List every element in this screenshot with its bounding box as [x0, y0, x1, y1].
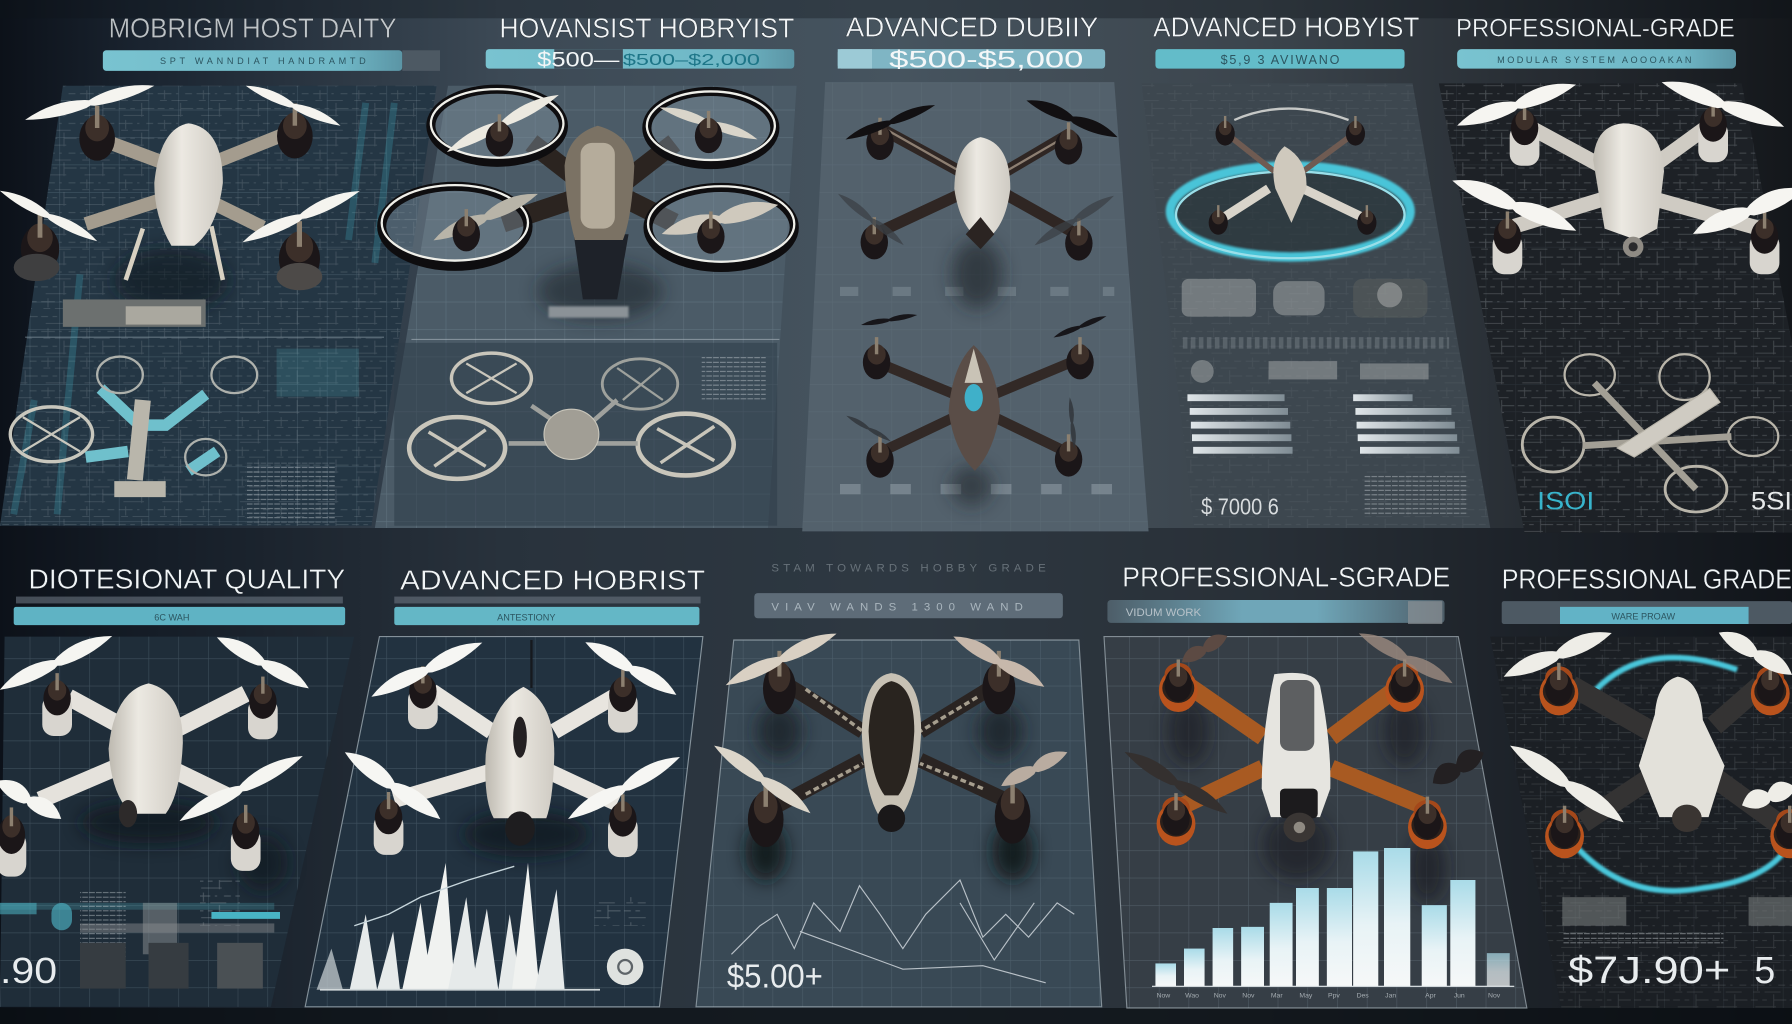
glowing ring — [1570, 658, 1792, 891]
card background — [1104, 637, 1527, 1008]
price bar — [1457, 49, 1736, 69]
price bar — [486, 46, 794, 71]
title: PROFESSIONAL-SGRADE — [1122, 561, 1450, 592]
drone: white quadcopter — [341, 635, 683, 857]
price bar: $500-$5,000 — [889, 46, 1083, 73]
price: $7J.90+ — [1568, 949, 1730, 991]
panel: top tier 3 — [802, 12, 1149, 531]
card background — [375, 86, 797, 528]
axis labels: May — [1299, 993, 1313, 1000]
drone: white quadcopter — [0, 79, 362, 327]
bar chart — [1152, 848, 1514, 1000]
axis labels: Apr — [1425, 993, 1437, 1000]
price bar: 6C WAH — [154, 613, 189, 623]
faint title: STAM TOWARDS HOBBY GRADE — [771, 562, 1046, 574]
detail thumbnails — [1182, 279, 1429, 383]
drone: dark quadcopter, lower — [845, 312, 1107, 506]
panel: top tier 1 — [0, 13, 440, 526]
drone: white quadcopter — [0, 628, 313, 891]
price bar: VIDUM WORK — [1126, 607, 1202, 619]
axis labels: Mar — [1271, 993, 1283, 1000]
card background — [1439, 83, 1792, 533]
card background — [0, 637, 354, 1007]
detail thumbnails — [1562, 897, 1792, 945]
detail thumbnails — [0, 880, 280, 989]
price bar — [754, 593, 1063, 618]
drone: silver folded X — [1522, 354, 1778, 512]
price bar — [14, 597, 345, 625]
card background — [0, 86, 437, 526]
price bar — [394, 597, 701, 625]
axis labels: Wao — [1185, 993, 1199, 1000]
drone: teal blueprint quadcopter — [10, 349, 359, 522]
price bar: $500— — [537, 46, 620, 71]
price bar: $500–$2,000 — [623, 52, 760, 69]
drone: white pro quadcopter — [1449, 74, 1792, 274]
axis labels — [1157, 993, 1501, 1000]
card background — [305, 637, 703, 1007]
panel: bottom tier 3 — [696, 562, 1102, 1007]
drone: ring quadcopter — [1170, 109, 1410, 258]
price label, teal: ISOI — [1537, 488, 1594, 516]
price bar — [103, 50, 440, 71]
price bar: ANTESTIONY — [497, 613, 555, 623]
price bar: WARE PROAW — [1611, 611, 1676, 621]
title: MOBRIGM HOST DAITY — [109, 13, 397, 44]
bar list — [1187, 394, 1459, 454]
card background — [696, 640, 1102, 1007]
drone: dark quadcopter, upper — [836, 94, 1120, 309]
axis labels: Nov — [1242, 993, 1255, 1000]
panel: top tier 4 — [1142, 12, 1490, 528]
card background — [802, 82, 1149, 531]
line chart — [731, 880, 1074, 983]
title: HOVANSIST HOBRYIST — [499, 13, 795, 44]
price: .90 — [0, 950, 57, 991]
price bar — [838, 46, 1105, 73]
price, cropped: 5 — [1754, 949, 1775, 991]
panel: bottom tier 5 — [1490, 564, 1792, 1008]
price bar — [1107, 600, 1445, 624]
drone: silver wireframe — [409, 353, 766, 479]
axis labels: Jan — [1385, 993, 1396, 1000]
card background — [1490, 637, 1792, 1008]
price bar: $5,9 3 AVIWANO — [1221, 53, 1340, 67]
panel: bottom tier 2 — [305, 565, 705, 1007]
price: $5.00+ — [727, 958, 823, 995]
drone: white and orange quadcopter — [1122, 626, 1488, 903]
spike chart — [317, 863, 646, 990]
title: PROFESSIONAL-GRADE — [1456, 15, 1735, 43]
spec text block — [1365, 475, 1467, 517]
title: DIOTESIONAT QUALITY — [29, 564, 345, 595]
panel: top tier 5 — [1439, 15, 1792, 533]
axis labels: Ppv — [1328, 993, 1340, 1000]
panel: top tier 2 — [375, 13, 797, 528]
title: ADVANCED DUBIIY — [846, 12, 1098, 43]
price bar — [1155, 49, 1405, 69]
drone: dark quadcopter — [711, 626, 1070, 881]
axis labels: Jun — [1454, 993, 1465, 1000]
title: ADVANCED HOBRIST — [400, 565, 705, 596]
card background — [1142, 83, 1490, 528]
price bar: VIAV WANDS 1300 WAND — [771, 601, 1023, 613]
panel: bottom tier 4 — [1104, 561, 1527, 1008]
drone: ducted quadcopter — [382, 89, 794, 320]
drone: white and dark quadcopter — [1500, 624, 1792, 858]
title: ADVANCED HOBYIST — [1153, 12, 1420, 43]
panel: bottom tier 1 — [0, 564, 354, 1007]
axis labels: Nov — [1488, 993, 1501, 1000]
price bar: SPT WANNDIAT HANDRAMTD — [160, 56, 366, 66]
price bar: MODULAR SYSTEM AOOOAKAN — [1497, 55, 1691, 65]
axis labels: Nov — [1214, 993, 1226, 1000]
price note: $ 7000 6 — [1201, 493, 1279, 519]
axis labels: Des — [1357, 993, 1369, 1000]
price bar — [1502, 601, 1792, 624]
axis labels: Now — [1157, 993, 1170, 1000]
price label, white: 5SI — [1751, 488, 1792, 516]
